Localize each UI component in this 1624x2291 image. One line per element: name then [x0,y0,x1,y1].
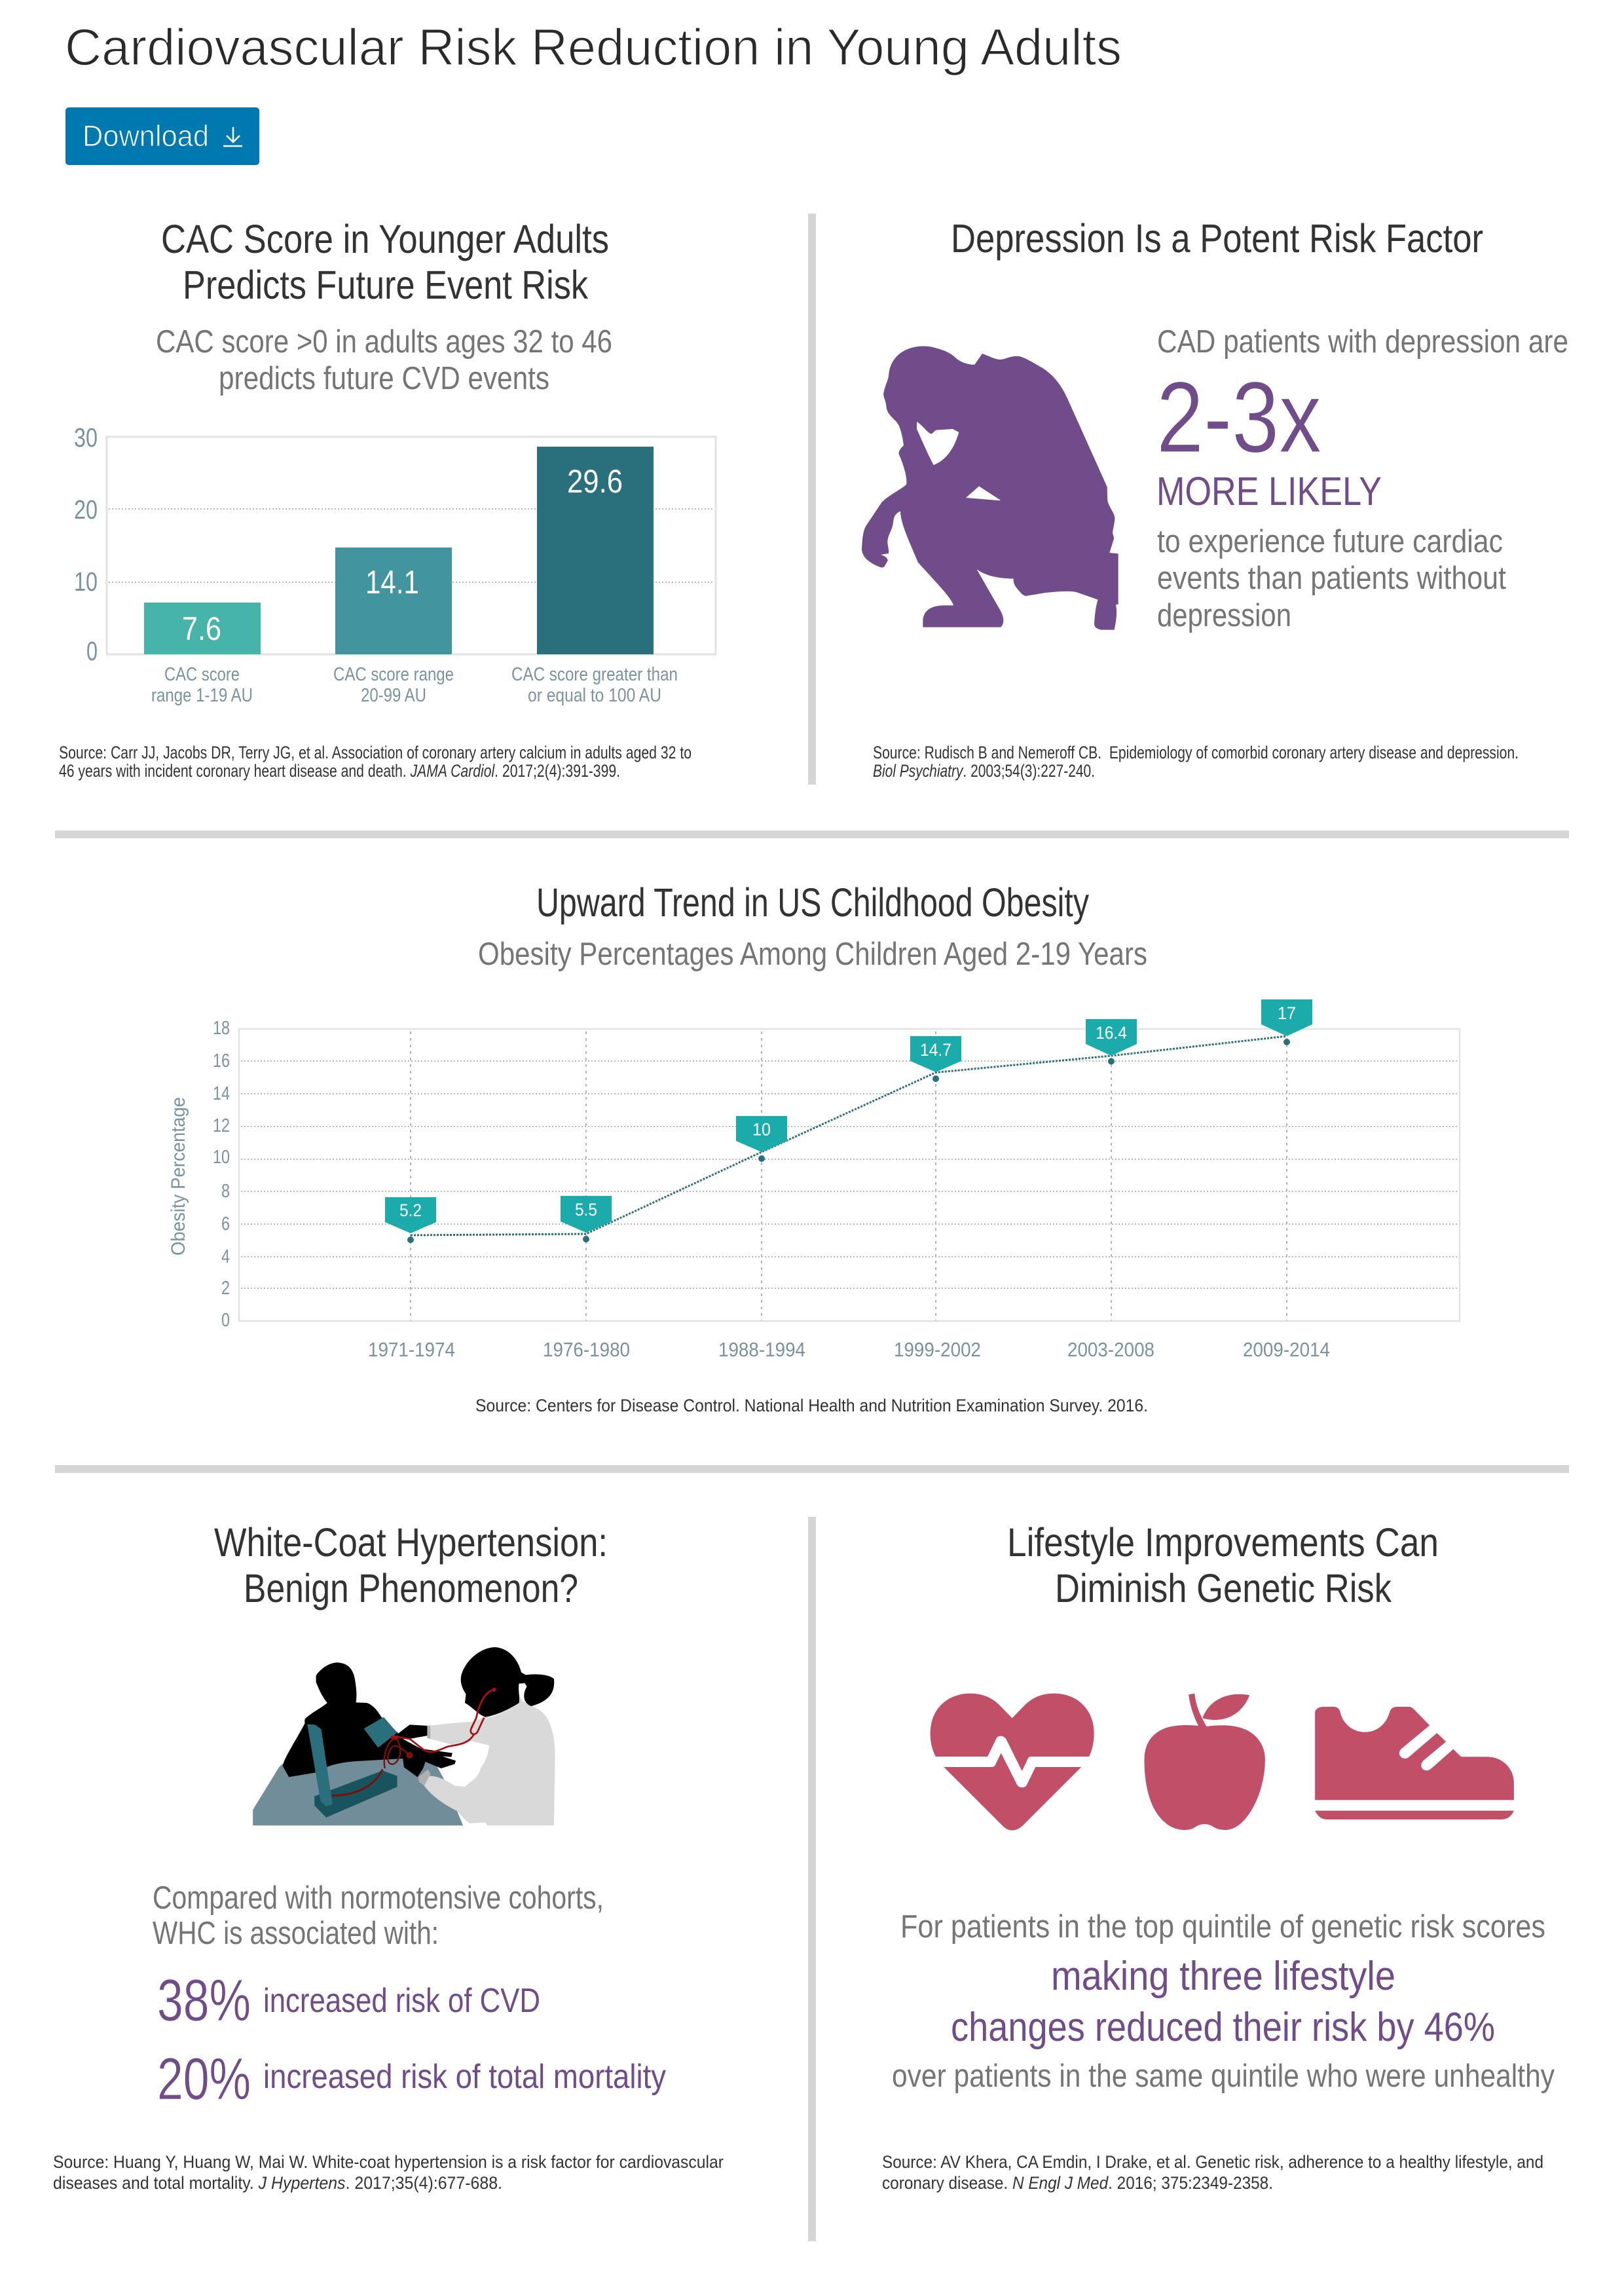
value marker: 16.4: 16.4 [1096,1023,1127,1043]
text: outcome: events than patients without [1157,561,1506,596]
text: compared with normotensive cohorts: WHC is associated with: [153,1916,439,1951]
icon: sneaker [1315,1707,1514,1819]
statistic: 38% CVD [157,1968,540,2034]
text: patients in top quintile: For patients in the top quintile of genetic risk scores [900,1909,1545,1945]
panel: childhood obesity [168,880,1460,1415]
coat cuffs [418,1725,431,1786]
x axis labels: 1999-2002 [894,1338,981,1361]
subheading: CAC score: CAC score >0 in adults ages 32 to 46 [156,324,612,360]
icon: apple [1145,1694,1265,1830]
stethoscope and tubing [331,1688,496,1796]
value marker: 10 [736,1116,787,1152]
value marker: 14.7 [910,1036,961,1072]
bar chart: CAC score [74,422,716,706]
statistic: 20% mortality: increased risk of total mortality [263,2058,666,2096]
source: depression [873,743,1519,781]
icon: download arrow [223,127,242,146]
doctor coat [424,1694,555,1825]
bar: 29.6 [537,447,654,654]
x axis labels: 1988-1994 [718,1338,805,1361]
x axis labels [368,1338,1330,1361]
value marker: 17 [1261,999,1312,1036]
source: CAC score: Source: Carr JJ, Jacobs DR, Terry JG, et al. Association of coronary artery calcium in adults aged 32 to [59,743,692,762]
text: compared with normotensive cohorts [153,1880,604,1951]
source: lifestyle [882,2152,1543,2193]
heading: white-coat: White-Coat Hypertension: [214,1520,608,1565]
heading: obesity: Upward Trend in US Childhood Obesity [536,880,1089,925]
y axis labels: 12 [213,1115,230,1136]
heading: CAC score: CAC Score in Younger Adults [161,217,609,261]
source: obesity: Source: Centers for Disease Control. National Health and Nutrition Examination Survey. 2016. [475,1396,1148,1415]
statistic: 20% mortality [157,2047,666,2112]
callout: three lifestyle changes: making three lifestyle [1051,1954,1395,1999]
value marker: 5.2 [385,1197,436,1233]
panel: depression [862,216,1568,781]
value marker: 16.4 [1086,1019,1137,1056]
download button: Download [83,119,209,153]
heading: lifestyle: Lifestyle Improvements Can [1007,1520,1439,1565]
value marker: 5.5: 5.5 [575,1200,597,1220]
text: outcome: to experience future cardiac [1157,524,1503,559]
bar: 7.6 [144,603,261,654]
x axis labels: 2009-2014 [1243,1338,1330,1361]
illustration: doctor measuring blood pressure [253,1647,555,1825]
bar: 14.1 [335,548,452,654]
heading: lifestyle [1007,1520,1439,1611]
source: CAC score: 46 years with incident coronary heart disease and death. JAMA Cardiol. 2017;2(4):391-399. [59,761,620,781]
source: lifestyle: coronary disease. N Engl J Med. 2016; 375:2349-2358. [882,2173,1273,2193]
icon: depressed person silhouette [862,346,1118,630]
y axis labels: 8 [221,1181,230,1202]
callout: three lifestyle changes: changes reduced their risk by 46% [951,2005,1495,2050]
text: compared with normotensive cohorts: Compared with normotensive cohorts, [153,1880,604,1916]
text: more likely: MORE LIKELY [1156,469,1382,513]
category labels: 20-99 AU [361,685,426,706]
value marker: 10: 10 [752,1120,771,1140]
category labels: CAC score range [333,664,454,685]
data points [407,1039,1290,1243]
y axis labels [213,1018,230,1331]
text: outcome [1157,524,1506,633]
statistic: 20% mortality: 20% [157,2047,251,2112]
y axis labels: 18 [213,1018,230,1039]
source: white-coat [53,2152,724,2193]
bar: 29.6: 29.6 [567,463,623,500]
bar: 14.1: 14.1 [365,564,419,601]
y axis labels: 30 [74,422,98,453]
y axis labels: 16 [213,1051,230,1071]
x axis labels: 1976-1980 [543,1338,630,1361]
blood pressure cuff [364,1717,397,1747]
value marker: 17: 17 [1278,1003,1296,1023]
table [253,1751,463,1825]
category labels [151,664,678,706]
value marker: 5.2: 5.2 [399,1201,422,1220]
download button [65,107,259,165]
subheading: CAC score [156,324,612,396]
source: depression: Biol Psychiatry. 2003;54(3):227-240. [873,761,1095,781]
monitor [307,1724,397,1817]
panel: CAC score [59,217,716,781]
heading: white-coat [214,1520,608,1611]
bar: 7.6: 7.6 [182,610,221,647]
callout: three lifestyle changes [951,1954,1495,2050]
statistic: 2-3x: 2-3x [1156,361,1321,474]
y axis labels: 0 [221,1310,230,1331]
title: Cardiovascular Risk Reduction in Young Adults [65,18,1122,76]
panel: white-coat hypertension [53,1520,724,2193]
y axis labels: 20 [74,494,98,525]
category labels: CAC score greater than [511,664,678,685]
heading: white-coat: Benign Phenomenon? [244,1566,578,1611]
source: white-coat: Source: Huang Y, Huang W, Mai W. White-coat hypertension is a risk factor for cardiovascular [53,2152,724,2172]
heading: depression: Depression Is a Potent Risk Factor [951,216,1483,261]
icon: heart with pulse [931,1694,1094,1831]
x axis labels: 1971-1974 [368,1338,455,1361]
line chart: obesity [168,999,1460,1361]
heading: CAC score: Predicts Future Event Risk [183,263,588,307]
category labels: range 1-19 AU [151,685,253,706]
value marker: 14.7: 14.7 [920,1040,951,1060]
x axis labels: 2003-2008 [1067,1338,1154,1361]
category labels: CAC score [164,664,240,685]
text: CAD patients: CAD patients with depression are [1157,324,1568,360]
statistic: 38% CVD: 38% [157,1968,251,2034]
heading: CAC score [161,217,609,307]
trend line [411,1036,1287,1235]
statistic: 38% CVD: increased risk of CVD [263,1982,540,2020]
y axis labels [74,422,98,666]
patient [283,1662,456,1777]
subheading: CAC score: predicts future CVD events [219,361,549,396]
heading: lifestyle: Diminish Genetic Risk [1055,1566,1392,1611]
doctor head [461,1647,554,1717]
y axis labels: 14 [213,1083,230,1104]
source: white-coat: diseases and total mortality. J Hypertens. 2017;35(4):677-688. [53,2173,502,2193]
category labels: or equal to 100 AU [528,685,661,706]
source: lifestyle: Source: AV Khera, CA Emdin, I Drake, et al. Genetic risk, adherence to a healthy lifestyle, and [882,2152,1543,2172]
y axis labels: 10 [74,567,98,597]
subheading: obesity: Obesity Percentages Among Children Aged 2-19 Years [478,937,1147,972]
panel: lifestyle [882,1520,1555,2193]
text: outcome: depression [1157,598,1291,633]
value marker: 5.5 [561,1196,612,1233]
y axis labels: 10 [213,1147,230,1168]
y axis labels: 6 [221,1214,230,1235]
y axis labels: 2 [221,1278,230,1299]
source: CAC score [59,743,692,781]
y axis title: Obesity Percentage [168,1097,189,1256]
y axis labels: 0 [86,636,98,666]
y axis labels: 4 [221,1246,230,1267]
